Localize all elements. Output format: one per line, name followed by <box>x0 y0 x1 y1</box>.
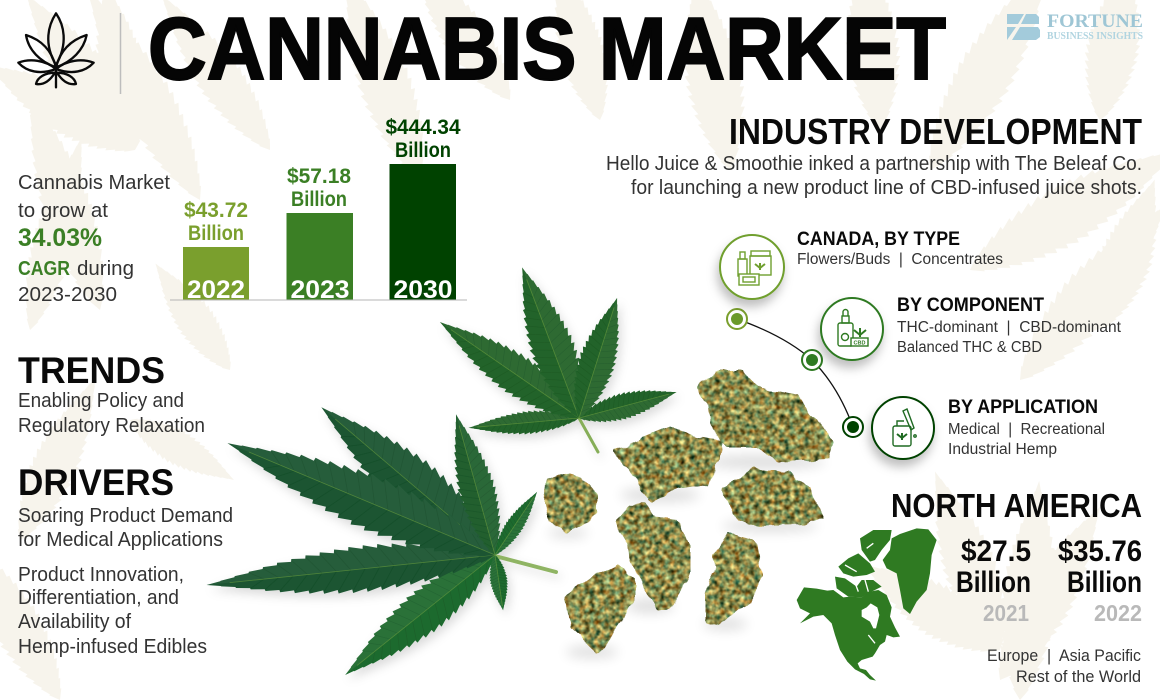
bar 2022: 2022 <box>187 276 245 304</box>
panel: drivers: DRIVERS <box>18 462 174 503</box>
icon: jar, bottle and tin <box>738 251 771 285</box>
text block: growth statement <box>18 171 170 306</box>
stat: 2022 value: Billion <box>1067 566 1142 599</box>
bar 2023: 2023 <box>290 276 350 304</box>
logo: Fortune Business Insights: FORTUNE <box>1047 11 1143 32</box>
bar 2022: Billion <box>188 222 244 245</box>
stat: 2021 value <box>956 535 1031 626</box>
panel: industry development: Hello Juice & Smoothie inked a partnership with The Beleaf Co. <box>606 153 1142 175</box>
text block: growth statement: to grow at <box>18 199 108 222</box>
panel: trends: Regulatory Relaxation <box>18 415 205 437</box>
dot 2 <box>802 350 822 370</box>
bar 2023 <box>286 165 353 304</box>
bar chart <box>170 116 467 304</box>
text block: growth statement: Cannabis Market <box>18 171 170 194</box>
map: North America <box>797 528 937 681</box>
stat: 2021 value: 2021 <box>983 600 1029 626</box>
item: Canada by type <box>720 228 1003 299</box>
panel: drivers <box>18 462 233 658</box>
item: by application: Industrial Hemp <box>948 441 1057 458</box>
stat: 2022 value: 2022 <box>1094 600 1142 626</box>
panel: drivers: for Medical Applications <box>18 529 223 551</box>
panel: industry development: for launching a new product line of CBD-infused juice shots. <box>631 177 1142 199</box>
text block: growth statement: 2023-2030 <box>18 283 117 306</box>
stat: 2021 value: $27.5 <box>961 535 1031 568</box>
stat: 2021 value: Billion <box>956 566 1031 599</box>
item: by application <box>872 396 1105 459</box>
icon: cannabis leaf outline logo <box>18 13 94 87</box>
panel: drivers: Differentiation, and <box>18 587 179 609</box>
icon: CBD dropper bottle <box>838 310 868 346</box>
dot 1 <box>727 309 747 329</box>
text block: growth statement: CAGR <box>18 258 70 280</box>
text block: growth statement: 34.03% <box>18 224 102 252</box>
panel: drivers: Soaring Product Demand <box>18 505 233 527</box>
divider <box>120 13 122 94</box>
icon: FB mark <box>1007 14 1040 40</box>
bar 2022: $43.72 <box>184 199 248 222</box>
stat: 2022 value: $35.76 <box>1058 535 1142 568</box>
panel: drivers: Product Innovation, <box>18 564 184 586</box>
item: by component: BY COMPONENT <box>897 294 1044 316</box>
icon: CBD dropper bottle: CBD <box>854 340 865 346</box>
bar 2023: Billion <box>291 188 347 211</box>
bar 2030 <box>386 116 461 304</box>
panel: trends: Enabling Policy and <box>18 390 184 412</box>
stat: 2022 value <box>1058 535 1142 626</box>
bar 2022 <box>183 199 249 304</box>
panel: industry development <box>606 111 1142 199</box>
logo: Fortune Business Insights <box>1007 11 1143 42</box>
panel: North America: Rest of the World <box>1016 667 1141 686</box>
item: by application: BY APPLICATION <box>948 396 1098 418</box>
panel: North America: Europe | Asia Pacific <box>987 646 1141 665</box>
cannabis leaf, large <box>204 386 556 693</box>
panel: drivers: Availability of <box>18 611 131 633</box>
item: by component: THC-dominant | CBD-dominant <box>897 319 1122 336</box>
dot 3 <box>843 417 863 437</box>
item: by component <box>821 294 1122 360</box>
panel: drivers: Hemp-infused Edibles <box>18 636 207 658</box>
bar 2030: Billion <box>395 139 451 162</box>
item: Canada by type: Flowers/Buds | Concentrates <box>797 251 1003 268</box>
cannabis leaf, small <box>428 259 680 452</box>
bar 2030: $444.34 <box>386 116 461 139</box>
item: by component: Balanced THC & CBD <box>897 339 1042 356</box>
cannabis buds <box>547 373 832 658</box>
connector curve and dots <box>727 309 863 437</box>
panel: North America <box>891 487 1142 686</box>
icon: oil bottle with dropper <box>893 409 916 446</box>
text block: growth statement: during <box>77 257 134 280</box>
panel: trends: TRENDS <box>18 350 165 391</box>
panel: trends <box>18 350 205 437</box>
bar 2023: $57.18 <box>287 165 351 188</box>
item: Canada by type: CANADA, BY TYPE <box>797 228 960 250</box>
logo: Fortune Business Insights: BUSINESS INSIGHTS <box>1047 31 1143 42</box>
item: by application: Medical | Recreational <box>948 421 1105 438</box>
bar 2030: 2030 <box>394 276 452 304</box>
title: CANNABIS MARKET <box>148 0 946 98</box>
